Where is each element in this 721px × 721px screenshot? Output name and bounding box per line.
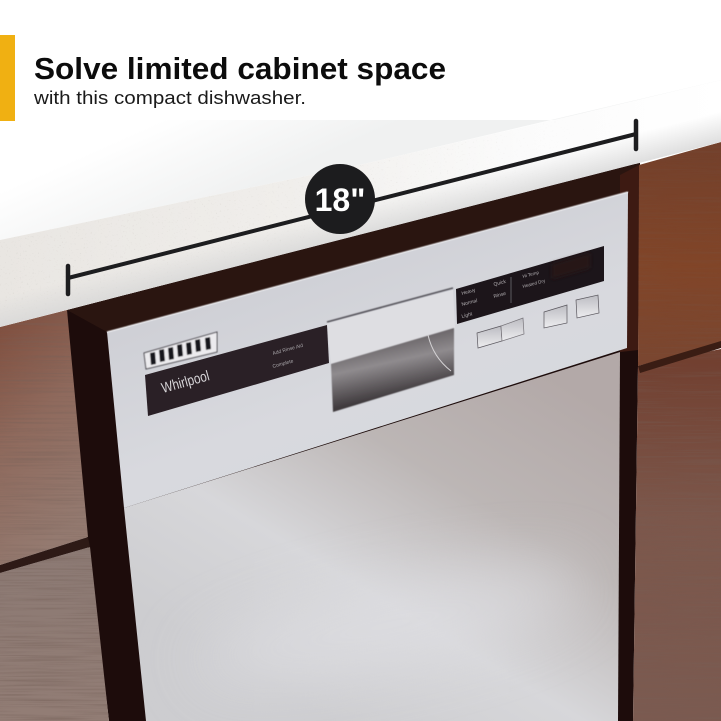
dishwasher lower door	[124, 352, 620, 721]
label: Complete: Complete	[272, 358, 294, 370]
label: Normal: Normal	[461, 298, 478, 308]
title: Solve limited cabinet space	[34, 51, 446, 86]
label: Heated Dry: Heated Dry	[522, 278, 546, 289]
panel: left wood cabinets	[0, 305, 110, 721]
gap shadow above panel	[67, 163, 640, 332]
dimension badge: 18"	[315, 182, 365, 218]
dimension arrow: 18 inch width	[68, 121, 636, 294]
vent indicator	[144, 332, 217, 369]
handle recess	[331, 328, 454, 412]
right control strip	[456, 246, 604, 324]
handle	[327, 288, 455, 412]
label: Hi Temp: Hi Temp	[522, 270, 540, 279]
black display strip with logo	[145, 325, 329, 416]
dishwasher control panel	[107, 192, 628, 508]
counter top surface	[0, 80, 721, 240]
dimension badge	[305, 164, 375, 234]
control buttons	[477, 295, 599, 348]
label: Quick: Quick	[493, 279, 507, 288]
right cabinet post	[620, 165, 639, 352]
logo: Whirlpool: Whirlpool	[160, 368, 211, 397]
label: Add Rinse Aid: Add Rinse Aid	[272, 343, 304, 357]
dark cabinet gap behind dishwasher	[60, 160, 640, 721]
label: Heavy: Heavy	[461, 287, 477, 297]
counter front edge	[0, 80, 721, 327]
yellow accent bar	[0, 35, 15, 121]
subtitle: with this compact dishwasher.	[33, 88, 306, 108]
countertop	[0, 80, 721, 330]
panel: right wood cabinets	[630, 140, 721, 721]
label: Light: Light	[461, 311, 474, 320]
label: Rinse: Rinse	[493, 291, 507, 300]
